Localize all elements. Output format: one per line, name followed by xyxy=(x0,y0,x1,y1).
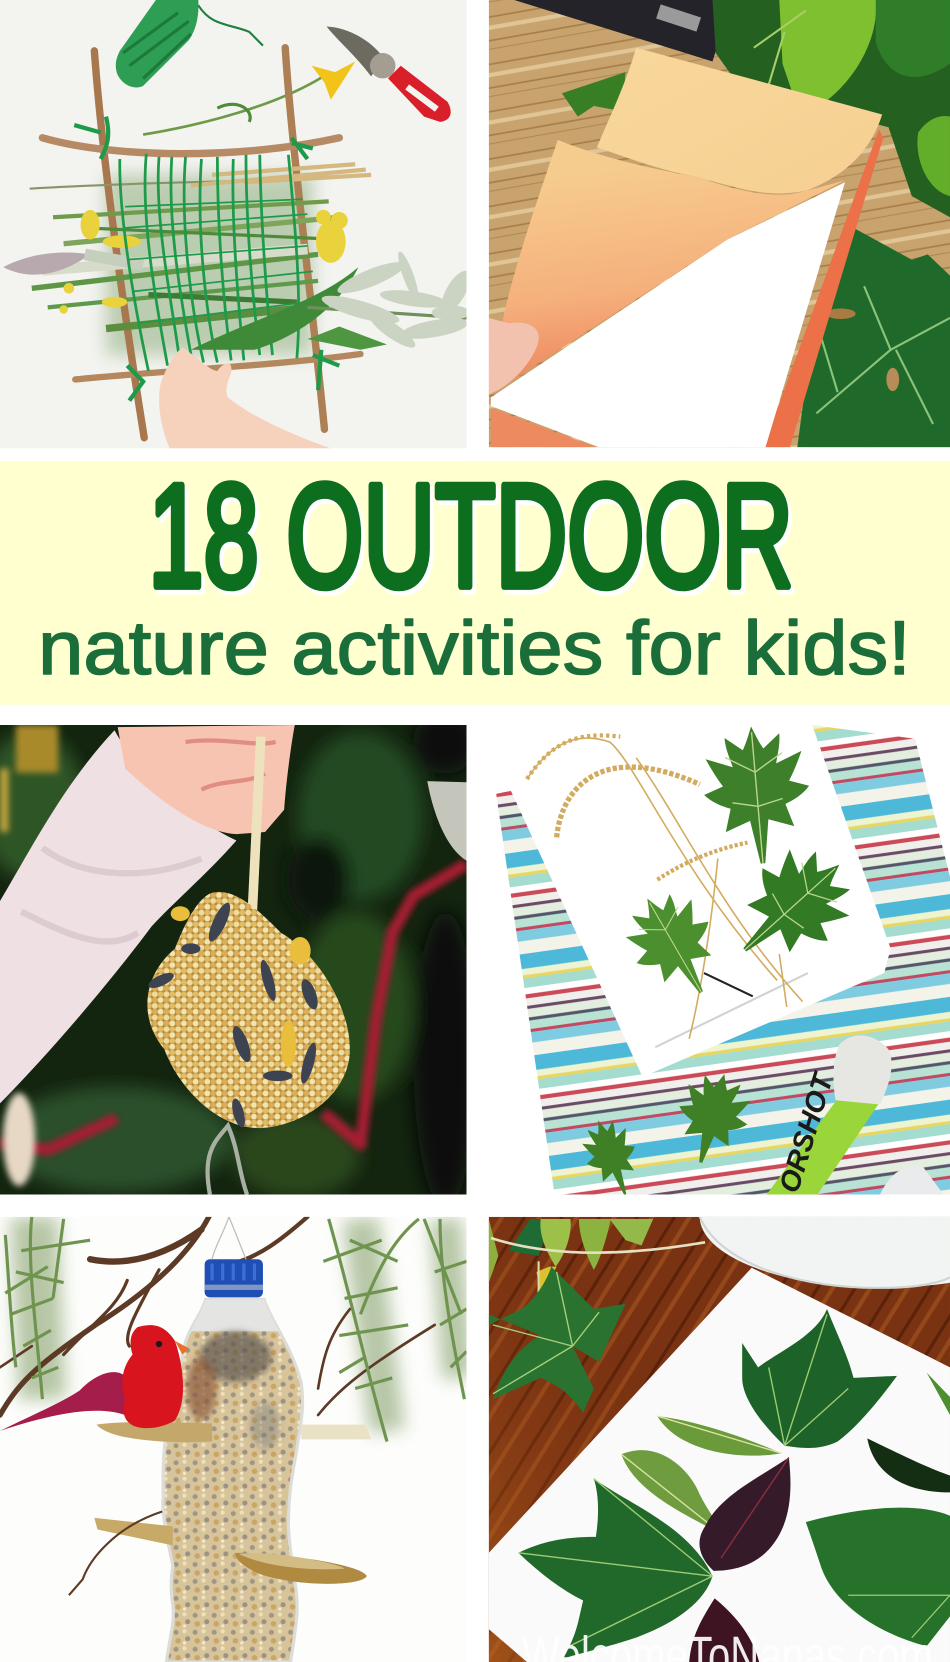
yellow blossoms xyxy=(59,210,348,314)
golden grass stems xyxy=(527,735,803,1039)
upper curled peach page xyxy=(597,48,882,193)
big green leaf bottom right xyxy=(797,228,950,447)
hanging wire xyxy=(212,1217,246,1259)
white paper card xyxy=(509,725,891,1077)
panel: leaf pressing on striped placemat photo xyxy=(489,722,950,1203)
cream ribbon xyxy=(252,737,261,912)
white plate xyxy=(700,1146,950,1288)
twig end xyxy=(704,973,753,996)
large green maple leaf xyxy=(518,1479,712,1659)
icon: green twine spool xyxy=(116,0,263,87)
icon: red pruning shears xyxy=(327,26,451,122)
blurred tree background xyxy=(0,710,477,1208)
small oak leaf xyxy=(667,1065,758,1172)
leaf pile top right xyxy=(712,0,950,217)
oak leaf left xyxy=(611,878,737,1013)
panel: leaf paper and peach page photo xyxy=(489,0,950,447)
green warp strings xyxy=(74,117,339,401)
white ornament xyxy=(3,1093,35,1186)
panel: birdseed ornament photo xyxy=(0,710,477,1208)
bottle with seed xyxy=(163,1299,303,1662)
lower wooden spoon xyxy=(235,1553,367,1584)
hand thumb xyxy=(489,318,539,394)
second can cap xyxy=(880,1166,944,1195)
small fern sprig xyxy=(562,72,626,117)
panel: twig loom weaving photo xyxy=(0,0,476,448)
green cedar foliage xyxy=(5,1217,467,1442)
dark sunflower seeds xyxy=(146,900,321,1129)
lower peach page xyxy=(491,140,845,394)
bare twig xyxy=(69,1511,162,1595)
red bead garland xyxy=(0,864,467,1150)
clear bottle neck xyxy=(191,1299,279,1331)
woven grasses and herbs xyxy=(30,164,371,329)
seed ball xyxy=(146,892,350,1129)
lower spoon handle xyxy=(94,1518,173,1545)
yellow ornaments xyxy=(0,725,58,832)
adhesive spray can: ORSHOT xyxy=(773,1068,841,1197)
panel: leaf collage on white paper photo xyxy=(489,1146,950,1662)
upper wooden spoon xyxy=(96,1422,371,1442)
banner xyxy=(0,461,950,705)
purple leaf bottom xyxy=(689,1598,759,1662)
adhesive spray can xyxy=(767,1035,892,1197)
white sheet xyxy=(491,182,845,447)
small oak leaf lower xyxy=(574,1112,649,1203)
green leaves top left xyxy=(489,1219,705,1309)
warm wood highlight xyxy=(489,1217,807,1662)
light green narrow leaf upper xyxy=(657,1416,781,1456)
hand holding the loom xyxy=(159,348,331,448)
hand holding ribbon xyxy=(118,725,295,834)
small leaf tip right xyxy=(927,1373,950,1415)
foliage mass shadow xyxy=(34,1217,458,1431)
pink knit sweater xyxy=(0,730,236,1103)
yellow flower on stem xyxy=(143,61,355,135)
twig frame xyxy=(42,48,360,438)
purple leaf xyxy=(699,1457,790,1571)
herb mass shadow xyxy=(106,175,313,355)
icon: black stapler xyxy=(514,0,732,61)
large rounded leaf right xyxy=(806,1508,950,1646)
blue bottle cap xyxy=(205,1259,263,1297)
red cardinal bird xyxy=(0,1325,189,1431)
dark leaf right xyxy=(867,1438,950,1492)
oak leaf right xyxy=(712,829,872,986)
purple flower spike xyxy=(3,252,143,275)
orange page edge xyxy=(763,129,883,447)
brown branches xyxy=(0,1217,435,1415)
light green narrow leaf lower xyxy=(621,1450,724,1536)
translucent grey shape xyxy=(427,781,467,861)
silver sage branch xyxy=(191,250,476,353)
white paper xyxy=(489,1268,950,1662)
oak leaf top xyxy=(699,722,815,868)
subtitle: nature activities for kids! xyxy=(38,606,911,691)
green maple leaf center xyxy=(742,1309,897,1448)
orange page corner xyxy=(491,408,596,447)
maple leaf on wood xyxy=(489,1267,626,1413)
dark seed patches xyxy=(187,1331,280,1449)
striped placemat xyxy=(496,725,950,1195)
hanging strings xyxy=(208,1126,247,1195)
panel: bottle bird feeder photo xyxy=(0,1217,467,1662)
